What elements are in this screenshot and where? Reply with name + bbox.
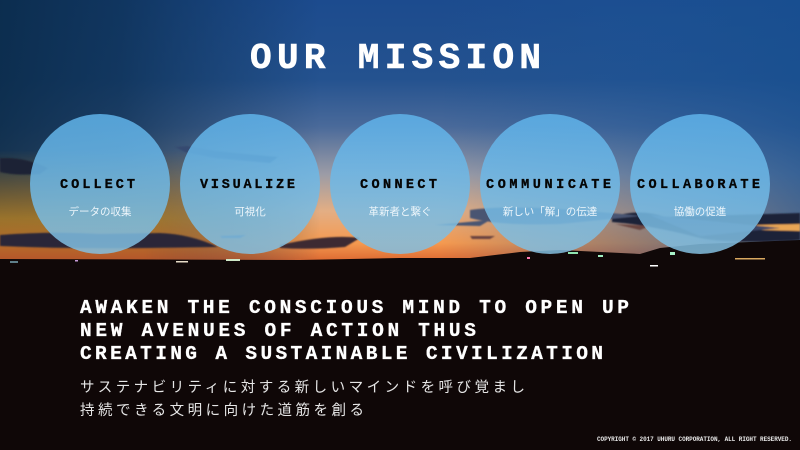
panel: connect [330,114,470,254]
panel: collaborate [630,114,770,254]
text: visualize Japanese: 可視化 [234,205,266,218]
heading: visualize: VISUALIZE [200,178,295,193]
mission statement in Japanese: サステナビリティに対する新しいマインドを呼び覚まし [80,379,525,396]
mission statement in English: CREATING A SUSTAINABLE CIVILIZATION [80,343,603,365]
mission statement in Japanese [80,379,525,419]
panel: collect [30,114,170,254]
text: collaborate Japanese: 協働の促進 [674,205,727,218]
text: collect Japanese: データの収集 [68,205,132,218]
title: OUR MISSION [250,38,541,79]
mission statement in Japanese: 持続できる文明に向けた道筋を創る [80,402,364,419]
heading: collect: COLLECT [60,178,135,193]
text: communicate Japanese: 新しい「解」の伝達 [503,205,598,218]
mission statement in English: AWAKEN THE CONSCIOUS MIND TO OPEN UP [80,297,629,319]
heading: communicate: COMMUNICATE [486,178,611,193]
background: dusk sky photograph [0,0,800,266]
copyright: COPYRIGHT © 2017 UHURU CORPORATION, ALL RIGHT RESERVED. [597,436,792,443]
panel: communicate [480,114,620,254]
mission statement in English [80,297,629,365]
heading: collaborate: COLLABORATE [637,178,760,193]
mission statement in English: NEW AVENUES OF ACTION THUS [80,320,476,342]
text: connect Japanese: 革新者と繋ぐ [368,205,432,218]
panel: visualize [180,114,320,254]
heading: connect: CONNECT [360,178,437,193]
